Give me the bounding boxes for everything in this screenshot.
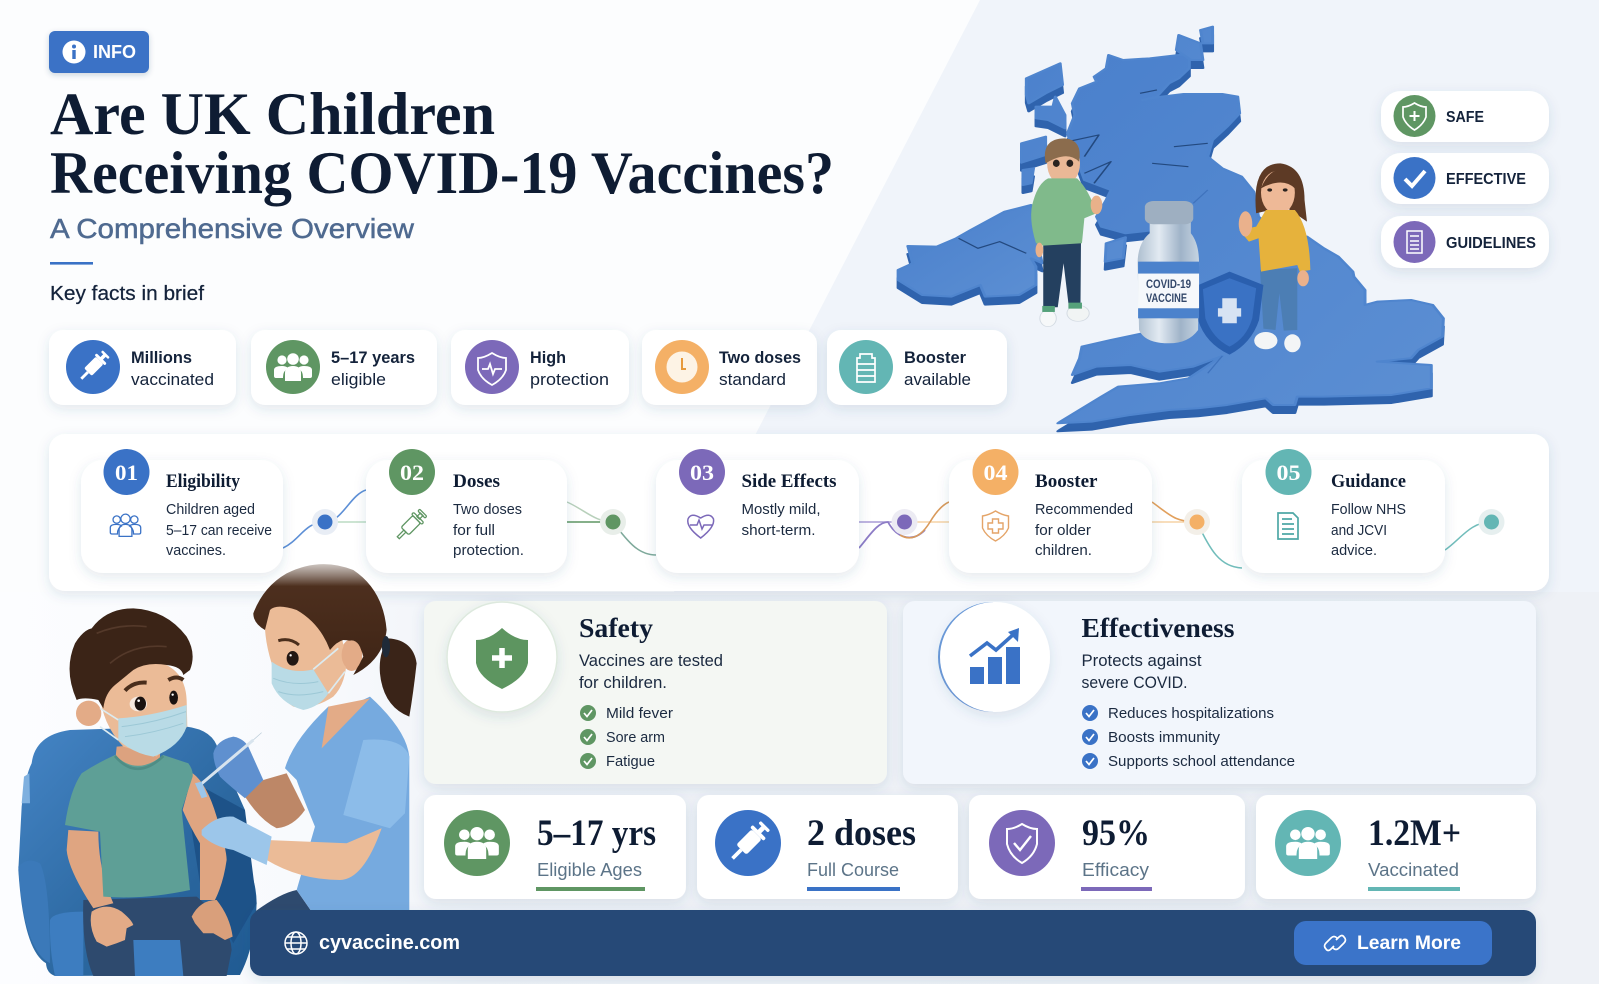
step 01: eligibility: Eligibility <box>166 471 240 492</box>
step 01: eligibility: 01 <box>115 460 138 485</box>
fact: millions vaccinated: vaccinated <box>131 370 214 389</box>
panel: effectiveness: Protects against <box>1082 652 1202 670</box>
stat: efficacy <box>969 795 1245 899</box>
stat: vaccinated: Vaccinated <box>1368 859 1459 880</box>
step 02: doses: Two doses <box>453 502 522 518</box>
fact: booster available: Booster <box>904 348 966 367</box>
badge: effective: EFFECTIVE <box>1446 171 1526 188</box>
footer bar: cyvaccine.com <box>319 931 460 954</box>
vaccine vial <box>1138 201 1199 343</box>
figure: boy in green hoodie <box>1031 138 1102 327</box>
step 04: booster: Recommended <box>1035 502 1133 518</box>
fact: booster available <box>827 330 1007 405</box>
fact: two doses: Two doses <box>719 348 801 367</box>
panel: effectiveness: severe COVID. <box>1082 674 1188 692</box>
title <box>50 81 834 206</box>
stat: eligible ages <box>424 795 686 899</box>
icon: globe <box>285 932 307 954</box>
step 04: booster: children. <box>1035 543 1092 559</box>
step 03: side effects <box>656 449 859 573</box>
checklist: safety: Mild fever <box>606 706 673 722</box>
title: Are UK Children <box>50 81 495 147</box>
panel: key facts <box>49 330 1007 405</box>
map: UK and Ireland 3D <box>898 27 1443 431</box>
stat: vaccinated: 1.2M+ <box>1368 813 1461 854</box>
stat: eligible ages: Eligible Ages <box>537 859 642 880</box>
step 04: booster <box>949 449 1152 573</box>
fact: millions vaccinated: Millions <box>131 348 192 367</box>
checklist: effectiveness <box>1082 705 1295 770</box>
fact: millions vaccinated <box>49 330 236 405</box>
illustration: nurse vaccinating boy <box>18 564 417 976</box>
stat: full course: Full Course <box>807 859 899 880</box>
step 04: booster: for older <box>1035 523 1091 539</box>
checklist: safety <box>580 705 673 770</box>
badge: guidelines: GUIDELINES <box>1446 235 1536 252</box>
panel: effectiveness <box>903 601 1536 784</box>
nurse <box>195 564 417 912</box>
panel: safety: for children. <box>579 674 667 692</box>
boy <box>65 608 233 976</box>
step 01: eligibility: 5–17 can receive <box>166 523 272 539</box>
badges: safe, effective, guidelines <box>1381 91 1549 268</box>
step 05: guidance <box>1242 449 1445 573</box>
step 05: guidance: and JCVI <box>1331 523 1387 539</box>
fact: 5-17 years eligible: 5–17 years <box>331 348 415 367</box>
shield with cross <box>1195 272 1263 355</box>
panel: safety: Vaccines are tested <box>579 652 723 670</box>
stats row <box>424 795 1536 899</box>
step 02: doses: protection. <box>453 543 524 559</box>
badge: INFO <box>49 31 149 73</box>
illustration: UK map with children and vaccine <box>898 27 1443 431</box>
heading: key facts: Key facts in brief <box>50 283 204 305</box>
step 01: eligibility: Children aged <box>166 502 255 518</box>
step 02: doses: for full <box>453 523 495 539</box>
fact: 5-17 years eligible <box>251 330 437 405</box>
footer bar <box>250 910 1536 976</box>
step 01: eligibility <box>81 449 283 573</box>
step 05: guidance: Guidance <box>1331 471 1406 492</box>
title: Receiving COVID-19 Vaccines? <box>50 140 834 206</box>
connectors between steps <box>283 490 1491 568</box>
badge: effective <box>1381 153 1549 204</box>
step 05: guidance: Follow NHS <box>1331 502 1406 518</box>
fact: high protection <box>451 330 629 405</box>
badge: guidelines <box>1381 216 1549 268</box>
vaccine vial: COVID-19 <box>1146 277 1191 291</box>
icon: green shield in circle <box>447 602 557 712</box>
button: learn more: Learn More <box>1357 932 1461 954</box>
step 05: guidance: 05 <box>1276 460 1300 485</box>
step 02: doses: 02 <box>400 460 424 485</box>
step 02: doses <box>366 449 567 573</box>
connector nodes <box>312 509 1504 535</box>
stat: eligible ages: 5–17 yrs <box>537 813 656 854</box>
checklist: effectiveness: Boosts immunity <box>1108 730 1221 746</box>
stat: efficacy: 95% <box>1082 813 1150 854</box>
badge: INFO: INFO <box>93 42 136 62</box>
fact: two doses: standard <box>719 370 786 389</box>
button: learn more <box>1294 921 1492 965</box>
step 02: doses: Doses <box>453 471 500 492</box>
vaccine vial: VACCINE <box>1146 291 1187 305</box>
panel: effectiveness: Effectiveness <box>1082 613 1234 643</box>
fact: 5-17 years eligible: eligible <box>331 370 386 389</box>
step 04: booster: Booster <box>1035 471 1098 492</box>
step 04: booster: 04 <box>984 460 1008 485</box>
panel: safety <box>424 601 887 784</box>
panel: process steps <box>49 434 1549 591</box>
badge: safe: SAFE <box>1446 109 1484 126</box>
step 03: side effects: 03 <box>690 460 714 485</box>
subtitle: A Comprehensive Overview <box>50 213 415 244</box>
figure: girl in yellow sweater <box>1239 163 1310 352</box>
step 03: side effects: Side Effects <box>742 471 836 492</box>
step 03: side effects: Mostly mild, <box>742 502 820 518</box>
chair <box>18 727 257 976</box>
icon: growth chart in circle <box>938 602 1050 712</box>
stat: efficacy: Efficacy <box>1082 859 1150 880</box>
stat: vaccinated <box>1256 795 1536 899</box>
stat: full course: 2 doses <box>807 813 916 854</box>
checklist: safety: Sore arm <box>606 730 665 746</box>
step 01: eligibility: vaccines. <box>166 543 226 559</box>
checklist: effectiveness: Reduces hospitalizations <box>1108 706 1274 722</box>
step 05: guidance: advice. <box>1331 543 1377 559</box>
panel: safety: Safety <box>579 613 654 643</box>
icon: info <box>62 40 86 64</box>
step 03: side effects: short-term. <box>742 523 816 539</box>
stat: full course <box>697 795 958 899</box>
badge: safe <box>1381 91 1549 142</box>
fact: high protection: High <box>530 348 566 367</box>
fact: high protection: protection <box>530 370 609 389</box>
fact: booster available: available <box>904 370 971 389</box>
checklist: effectiveness: Supports school attendance <box>1108 754 1295 770</box>
checklist: safety: Fatigue <box>606 754 655 770</box>
fact: two doses <box>642 330 817 405</box>
